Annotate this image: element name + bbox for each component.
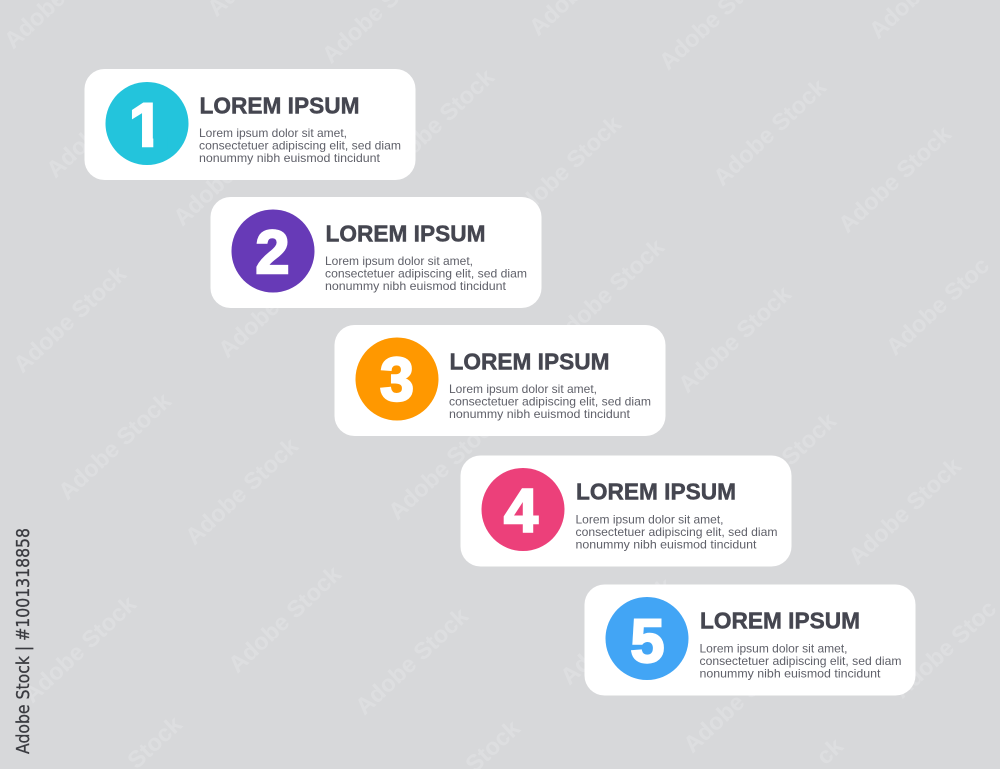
heading: step 3: LOREM IPSUM (450, 348, 610, 374)
text block: step 1: consectetuer adipiscing elit, sed diam (199, 138, 401, 152)
text block: step 3 (449, 382, 651, 421)
credit: vertical stock id: Adobe Stock | #1001318858 (14, 528, 34, 754)
text block: step 2: consectetuer adipiscing elit, sed diam (325, 266, 527, 280)
text block: step 2 (325, 254, 527, 293)
text block: step 2: Lorem ipsum dolor sit amet, (325, 254, 473, 268)
watermark: repeated Adobe Stock: Adobe Stock (53, 387, 177, 505)
watermark: repeated Adobe Stock: ck (811, 732, 849, 769)
text block: step 2: nonummy nibh euismod tincidunt (325, 279, 507, 293)
watermark: repeated Adobe Stock: Adobe Stock (168, 113, 292, 231)
text block: step 5 (700, 641, 902, 680)
icon: number 3 circle (356, 338, 438, 420)
watermark: repeated Adobe Stock: Adobe Stock (41, 65, 165, 183)
heading: step 5: LOREM IPSUM (700, 608, 860, 634)
icon: number 3 circle: 3 (380, 346, 414, 414)
icon: number 2 circle (232, 210, 314, 292)
heading: step 4: LOREM IPSUM (576, 478, 736, 504)
icon: number 1 circle: 1 (129, 91, 163, 159)
text block: step 4: nonummy nibh euismod tincidunt (576, 537, 757, 551)
watermark: repeated Adobe Stock: Adobe Stock (843, 452, 967, 570)
watermark: repeated Adobe Stock: Adobe Stock (376, 63, 500, 181)
watermark: repeated Adobe Stock: Adobe Stock (18, 590, 142, 708)
watermark: repeated Adobe Stock: Adobe Stock (383, 407, 507, 525)
text block: step 4: consectetuer adipiscing elit, sed diam (576, 525, 778, 539)
text block: step 4: Lorem ipsum dolor sit amet, (576, 512, 724, 526)
watermark: repeated Adobe Stock: Adobe Stock (678, 640, 802, 758)
panel: step 4 (460, 456, 792, 566)
text block: step 1: Lorem ipsum dolor sit amet, (199, 126, 347, 140)
icon: number 4 circle: 4 (504, 476, 538, 544)
watermark: repeated Adobe Stock: Adobe Stock (546, 233, 670, 351)
text block: step 3: Lorem ipsum dolor sit amet, (449, 382, 597, 396)
watermark: repeated Adobe Stock: Adobe Stoc (881, 252, 994, 360)
text block: step 3: consectetuer adipiscing elit, sed diam (449, 394, 651, 408)
text block: step 5: consectetuer adipiscing elit, sed diam (700, 654, 902, 668)
watermark: repeated Adobe Stock: Adobe Stoc (888, 595, 1000, 703)
watermark: repeated Adobe Stock: Adobe Stock (180, 432, 304, 550)
watermark: repeated Adobe Stock: Adobe Stock (673, 280, 797, 398)
text block: step 1 (199, 126, 401, 165)
watermark: repeated Adobe Stock: Adobe Stock (555, 572, 679, 690)
watermark: repeated Adobe Stock: Adobe Stock (833, 120, 957, 238)
text block: step 1: nonummy nibh euismod tincidunt (199, 151, 381, 165)
panel: step 2 (210, 197, 542, 308)
icon: number 2 circle: 2 (256, 218, 289, 286)
panel: step 1 (84, 69, 416, 180)
panel: step 3 (334, 325, 666, 436)
watermark: repeated Adobe Stock: Adobe Stock (213, 245, 337, 363)
icon: number 4 circle (482, 468, 564, 551)
icon: number 5 circle (606, 597, 688, 680)
watermark: repeated Adobe Stock: Adobe Stock (8, 260, 132, 378)
heading: step 1: LOREM IPSUM (200, 92, 360, 118)
watermark: repeated Adobe Stock: Adobe Stock (350, 602, 474, 720)
text block: step 5: nonummy nibh euismod tincidunt (700, 666, 881, 680)
icon: number 5 circle: 5 (631, 607, 664, 675)
watermark: repeated Adobe Stock: Adobe Stock (708, 73, 832, 191)
watermark: repeated Adobe Stock: Adobe Stock (223, 560, 347, 678)
watermark: repeated Adobe Stock: Adobe Stock (718, 407, 842, 525)
text block: step 4 (576, 512, 778, 551)
text block: step 5: Lorem ipsum dolor sit amet, (700, 641, 848, 655)
heading: step 2: LOREM IPSUM (326, 220, 486, 246)
watermark: repeated Adobe Stock: Adobe Stock (503, 110, 627, 228)
text block: step 3: nonummy nibh euismod tincidunt (449, 407, 631, 421)
icon: number 1 circle (106, 82, 188, 165)
panel: step 5 (584, 584, 916, 696)
